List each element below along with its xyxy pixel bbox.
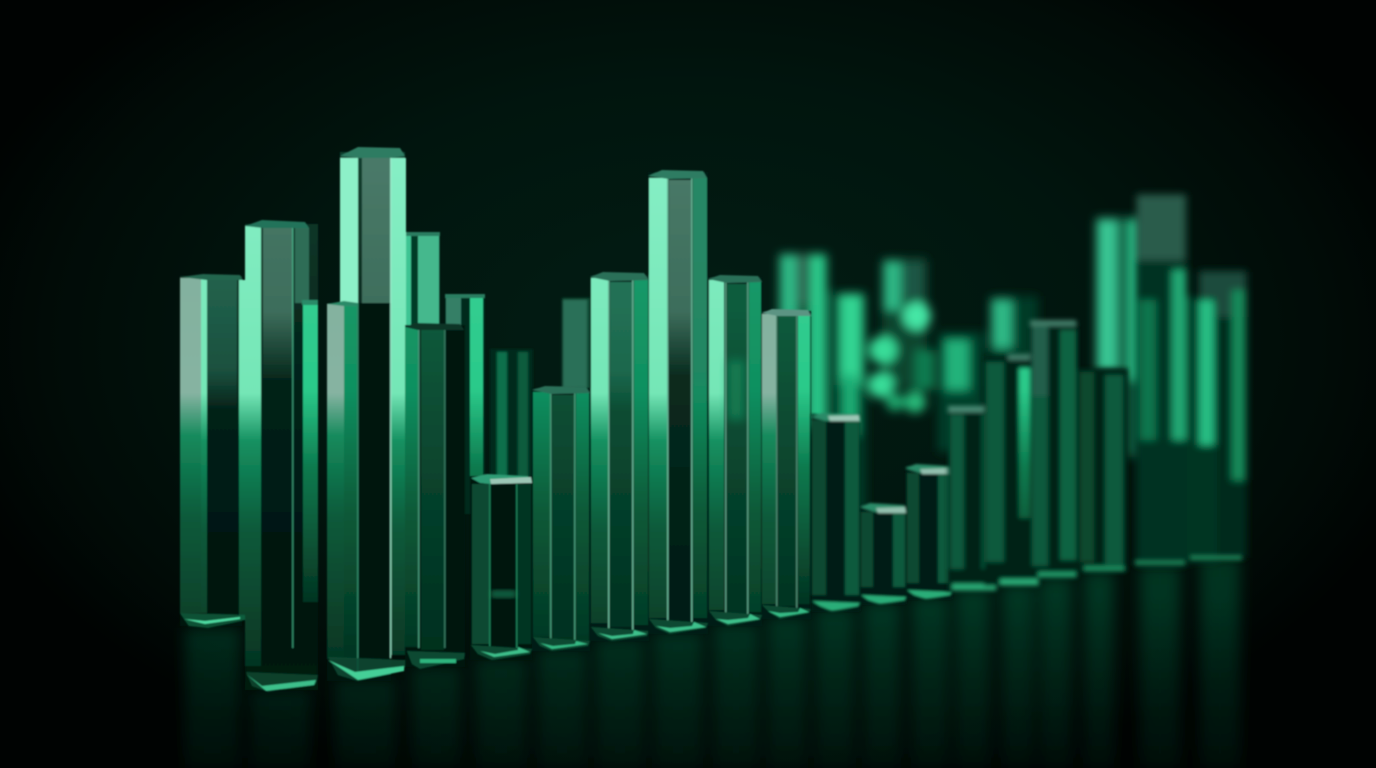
base glow — [861, 595, 906, 604]
bar 18 — [1030, 320, 1078, 578]
base glow — [471, 645, 532, 660]
bar bases right — [1135, 555, 1242, 565]
bar back 8 — [1198, 270, 1247, 558]
bar 11 — [708, 275, 762, 626]
base glow — [952, 584, 996, 590]
bar 9 — [590, 272, 649, 641]
bar 15 — [905, 464, 952, 599]
base glow — [1000, 579, 1038, 585]
bar 16 — [948, 406, 997, 591]
bar back 5 — [938, 332, 984, 452]
glowing lights — [868, 302, 935, 413]
bar 10 — [648, 170, 708, 634]
bar back 1 — [779, 253, 827, 433]
bar 1 — [180, 274, 246, 628]
bar back 9 — [1187, 297, 1217, 562]
bar 14 — [860, 503, 906, 604]
bar 2 — [245, 220, 318, 692]
base glow — [812, 601, 860, 611]
base glow — [533, 637, 590, 651]
base glow — [180, 613, 246, 628]
base glow — [907, 590, 952, 599]
bar 12 — [762, 309, 811, 619]
bar back 10 — [562, 298, 591, 398]
bar 13 — [811, 413, 860, 611]
bar back 4 — [990, 296, 1038, 386]
bar 7 — [470, 474, 532, 660]
base glow — [1038, 572, 1076, 577]
base glow — [762, 605, 811, 619]
base glow — [1084, 566, 1124, 571]
bar 4 — [405, 323, 465, 669]
bar back 2 — [830, 292, 866, 582]
bar 8 — [532, 386, 590, 651]
bar back 7 — [1136, 194, 1187, 566]
floor reflections — [185, 558, 1240, 768]
bar back 13 — [406, 232, 440, 332]
bar back 12 — [445, 294, 485, 514]
base glow — [591, 627, 649, 641]
back row: blurred bars — [779, 217, 1146, 582]
bar 19 — [1078, 368, 1128, 572]
bar back 11 — [490, 349, 533, 479]
base glow — [328, 657, 406, 681]
base glow — [649, 619, 708, 634]
bar back 3 — [882, 258, 927, 388]
base glow — [407, 651, 465, 669]
base glow — [246, 672, 318, 692]
bar back 6 — [1096, 217, 1146, 457]
tallest bar — [340, 147, 406, 652]
base glow — [709, 611, 762, 626]
bar 17 — [984, 354, 1040, 586]
bar 3 — [327, 158, 406, 681]
